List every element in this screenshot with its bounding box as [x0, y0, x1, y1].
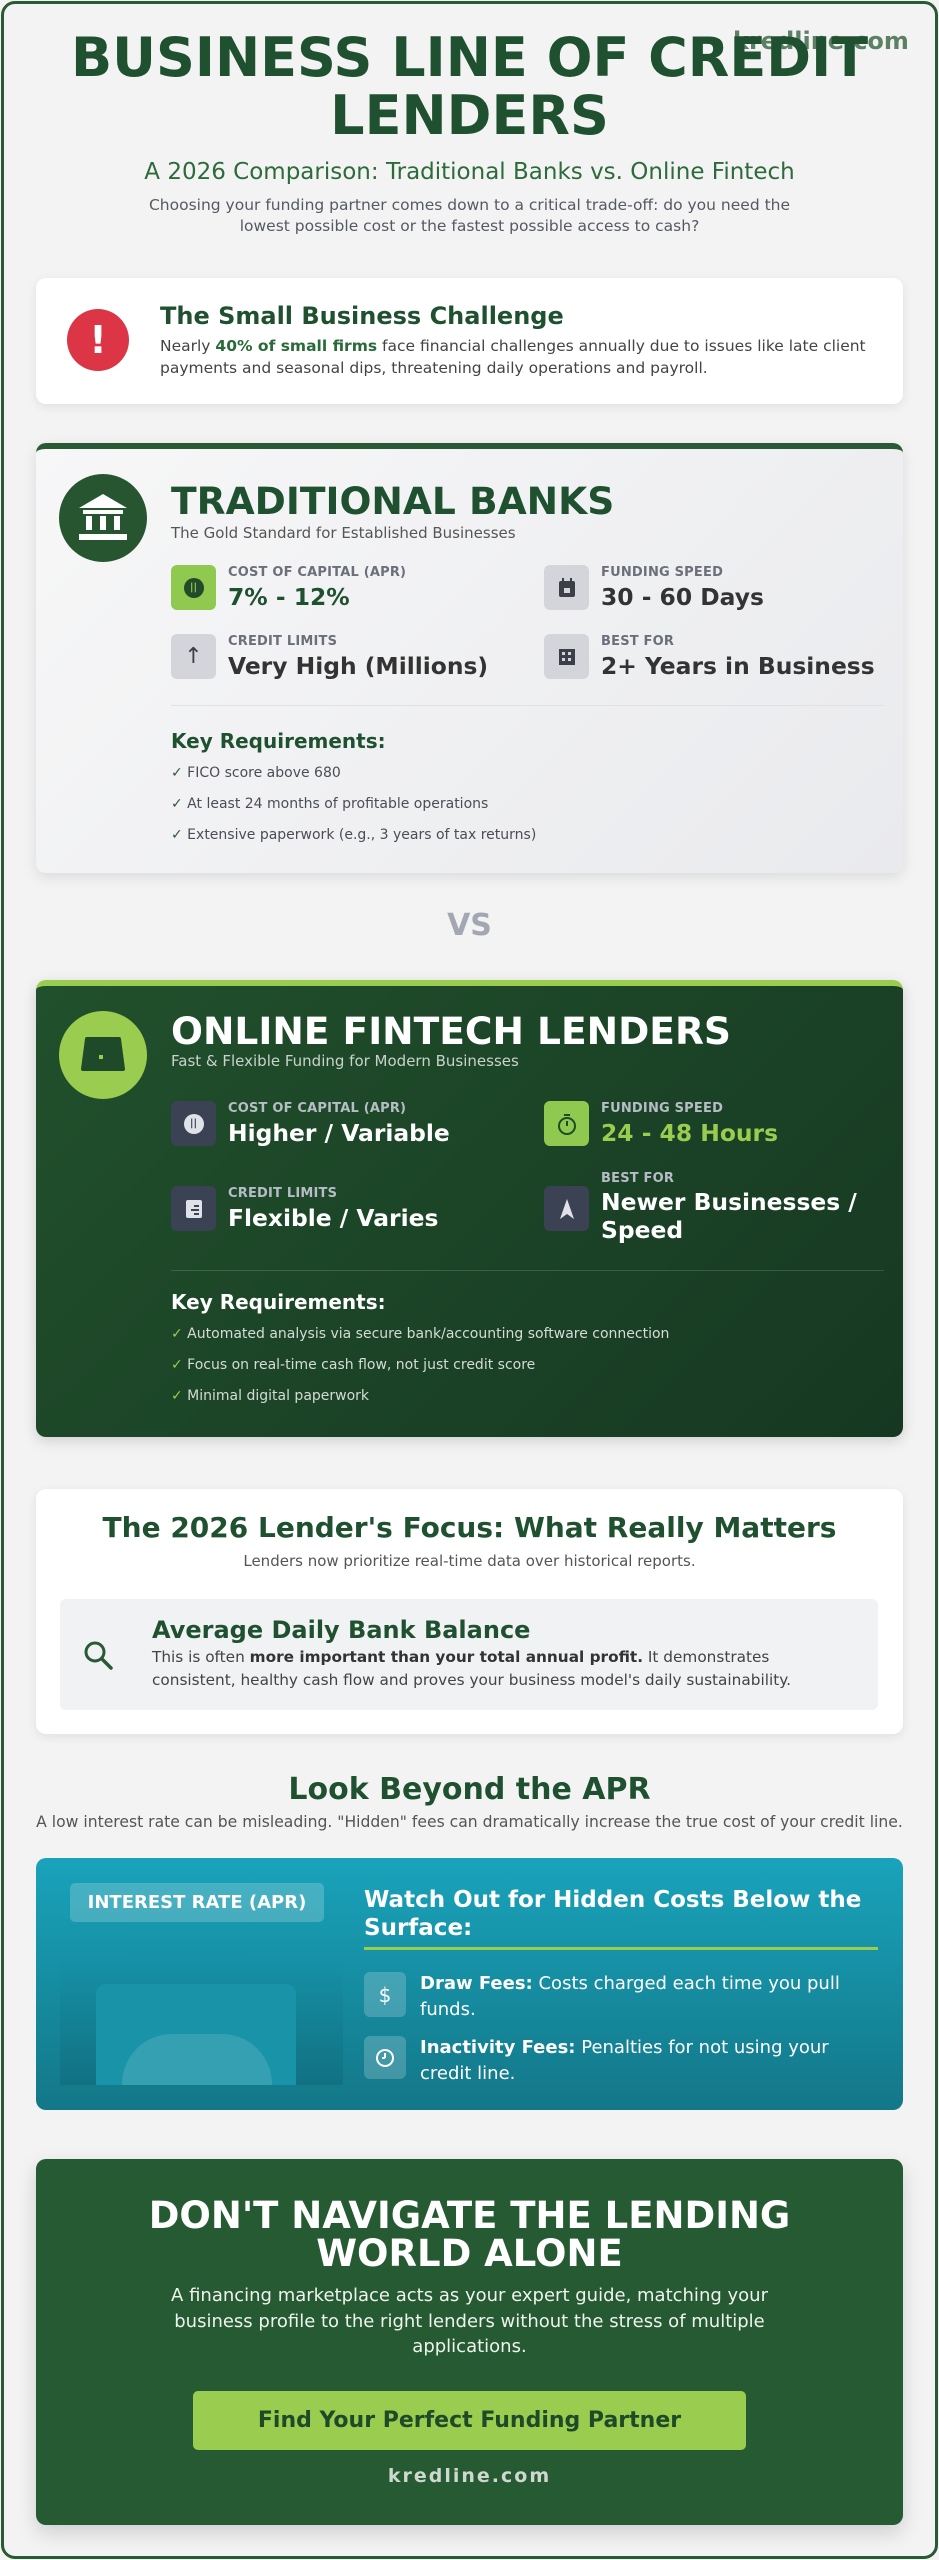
- stat: speed: [544, 565, 764, 611]
- stat: cost: COST OF CAPITAL (APR): [228, 565, 406, 580]
- stat: cost: Higher / Variable: [228, 1119, 450, 1147]
- button: [193, 2391, 746, 2450]
- stat: speed: FUNDING SPEED: [601, 565, 723, 580]
- stat: limits: Very High (Millions): [228, 652, 488, 680]
- callout: daily bank balance: Average Daily Bank Balance: [152, 1616, 530, 1644]
- item: draw fees: Draw Fees: Costs charged each time you pull funds.: [420, 1973, 840, 2020]
- stat: best for: BEST FOR: [601, 1171, 674, 1186]
- illustration: iceberg: INTEREST RATE (APR): [88, 1892, 306, 1913]
- stat: speed: [544, 1101, 778, 1147]
- subheading: The Gold Standard for Established Businesses: [171, 524, 516, 542]
- panel: traditional banks: [36, 443, 903, 873]
- heading: The Small Business Challenge: [160, 302, 564, 330]
- key requirements: ✓ Extensive paperwork (e.g., 3 years of tax returns): [171, 827, 536, 843]
- body: A financing marketplace acts as your expert guide, matching your business profile to the right lenders without the stress of multiple applications.: [171, 2285, 768, 2357]
- vs: VS: [447, 908, 492, 943]
- illustration: iceberg: [60, 1883, 343, 2085]
- item: draw fees: $: [379, 1982, 391, 2006]
- key requirements: Key Requirements:: [171, 729, 386, 753]
- heading: DON'T NAVIGATE THE LENDING WORLD ALONE: [149, 2194, 790, 2275]
- footer url: kredline.com: [388, 2465, 551, 2487]
- key requirements: ✓ Minimal digital paperwork: [171, 1388, 369, 1404]
- stat: limits: [171, 634, 488, 680]
- subheading: Fast & Flexible Funding for Modern Businesses: [171, 1052, 519, 1070]
- stat: best for: BEST FOR: [601, 634, 674, 649]
- heading: TRADITIONAL BANKS: [171, 479, 614, 523]
- key requirements: [171, 1290, 669, 1404]
- stat: speed: FUNDING SPEED: [601, 1101, 723, 1116]
- stat: limits: CREDIT LIMITS: [228, 634, 337, 649]
- icon: alert: !: [89, 318, 107, 362]
- stat: limits: [171, 1186, 438, 1232]
- icon: bank: [59, 474, 147, 562]
- heading: Watch Out for Hidden Costs Below the Surface:: [364, 1887, 861, 1941]
- stat: cost: [171, 1101, 450, 1147]
- callout: daily bank balance: [60, 1599, 878, 1710]
- panel: call to action: [36, 2159, 903, 2525]
- subheading: Lenders now prioritize real-time data over historical reports.: [243, 1552, 696, 1570]
- stat: cost: ||: [190, 1118, 197, 1128]
- stat: limits: CREDIT LIMITS: [228, 1186, 337, 1201]
- key requirements: ✓ FICO score above 680: [171, 765, 341, 781]
- heading: ONLINE FINTECH LENDERS: [171, 1009, 731, 1053]
- stat: cost: ||: [190, 582, 197, 592]
- stat: cost: [171, 565, 406, 611]
- heading: look beyond the apr: Look Beyond the APR: [288, 1772, 651, 1807]
- key requirements: [171, 729, 536, 843]
- panel: small business challenge: [36, 278, 903, 404]
- intro text: Choosing your funding partner comes down to a critical trade-off: do you need the lowest possible cost or the fastest possible access to cash?: [149, 196, 790, 235]
- key requirements: Key Requirements:: [171, 1290, 386, 1314]
- panel: online fintech: [36, 980, 903, 1437]
- text: apr subheading: A low interest rate can be misleading. "Hidden" fees can dramatically increase the true cost of your credit line.: [36, 1813, 903, 1831]
- callout: daily bank balance: This is often more important than your total annual profit. It demonstrates consistent, healthy cash flow and proves your business model's daily sustainability.: [152, 1648, 791, 1689]
- subtitle: A 2026 Comparison: Traditional Banks vs. Online Fintech: [144, 159, 795, 185]
- key requirements: ✓ Focus on real-time cash flow, not just credit score: [171, 1357, 535, 1373]
- item: inactivity fees: Inactivity Fees: Penalties for not using your credit line.: [420, 2037, 829, 2084]
- key requirements: ✓ At least 24 months of profitable operations: [171, 796, 488, 812]
- stat: cost: 7% - 12%: [228, 583, 350, 611]
- watermark: kredline.com: [733, 27, 909, 55]
- key requirements: ✓ Automated analysis via secure bank/accounting software connection: [171, 1326, 669, 1342]
- stat: limits: Flexible / Varies: [228, 1204, 438, 1232]
- stat: speed: 24 - 48 Hours: [601, 1119, 778, 1147]
- stat: best for: [544, 634, 875, 680]
- stat: best for: 2+ Years in Business: [601, 652, 875, 680]
- panel: hidden costs: [36, 1858, 903, 2110]
- body: Nearly 40% of small firms face financial challenges annually due to issues like late client payments and seasonal dips, threatening daily operations and payroll.: [160, 337, 866, 377]
- stat: speed: 30 - 60 Days: [601, 583, 764, 611]
- title: BUSINESS LINE OF CREDIT LENDERS: [71, 26, 868, 147]
- icon: alert: [67, 309, 129, 371]
- icon: magnifier: [84, 1642, 113, 1670]
- button: Find Your Perfect Funding Partner: [258, 2408, 681, 2433]
- heading: The 2026 Lender's Focus: What Really Matters: [103, 1511, 836, 1544]
- panel: lender focus: [36, 1489, 903, 1734]
- stat: limits: ↑: [184, 644, 203, 669]
- stat: best for: [544, 1171, 857, 1244]
- stat: cost: COST OF CAPITAL (APR): [228, 1101, 406, 1116]
- stat: best for: Newer Businesses / Speed: [601, 1188, 857, 1244]
- icon: fintech: [59, 1011, 147, 1099]
